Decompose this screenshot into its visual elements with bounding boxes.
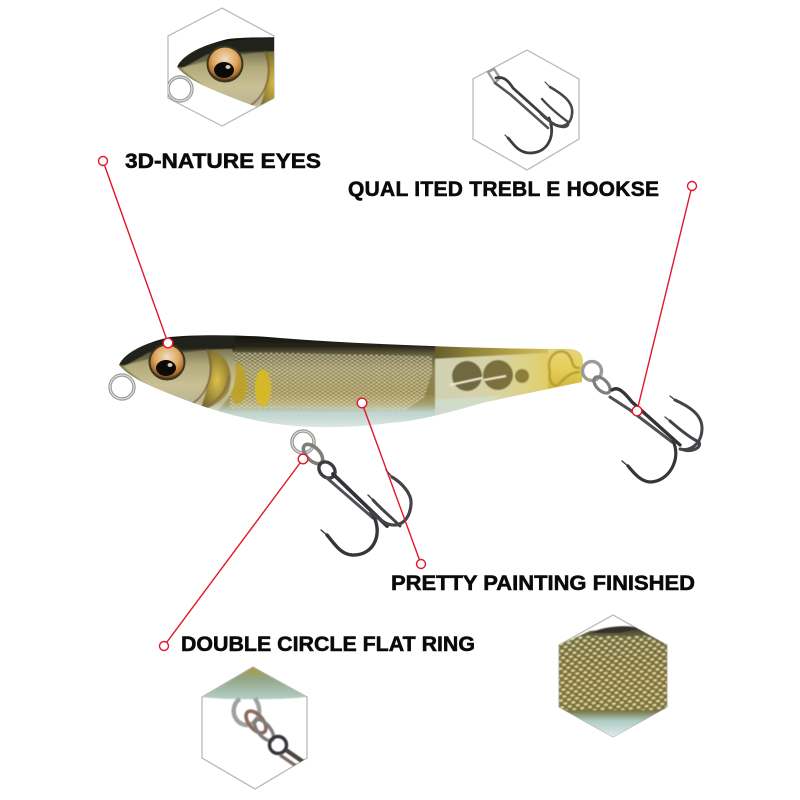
hexagon inset: painted scales close-up: [559, 615, 667, 737]
heading: 3D-nature eyes: 3D-NATURE EYES: [125, 150, 321, 173]
lure front: head, eye and painted scales: [110, 333, 435, 433]
lure rear: transparent section with rattle balls: [425, 344, 585, 418]
hexagon inset: treble hook close-up: [473, 50, 579, 170]
heading: pretty painting finished: PRETTY PAINTING FINISHED: [391, 572, 695, 595]
callout line: treble hook: [632, 182, 696, 416]
tail treble hook with double ring: [582, 362, 702, 482]
hexagon inset: double flat ring close-up: [202, 667, 312, 789]
heading: double circle flat ring: DOUBLE CIRCLE FLAT RING: [181, 633, 475, 656]
lure: main fishing lure body: [110, 333, 585, 433]
belly treble hook with double ring: [292, 431, 411, 555]
heading: qualited treble hookse: QUAL ITED TREBL E HOOKSE: [348, 178, 659, 201]
callout line: eyes: [98, 156, 173, 348]
callout line: painting: [357, 398, 426, 568]
hexagon inset: eye close-up: [167, 8, 275, 126]
callout line: flat ring: [160, 454, 308, 650]
